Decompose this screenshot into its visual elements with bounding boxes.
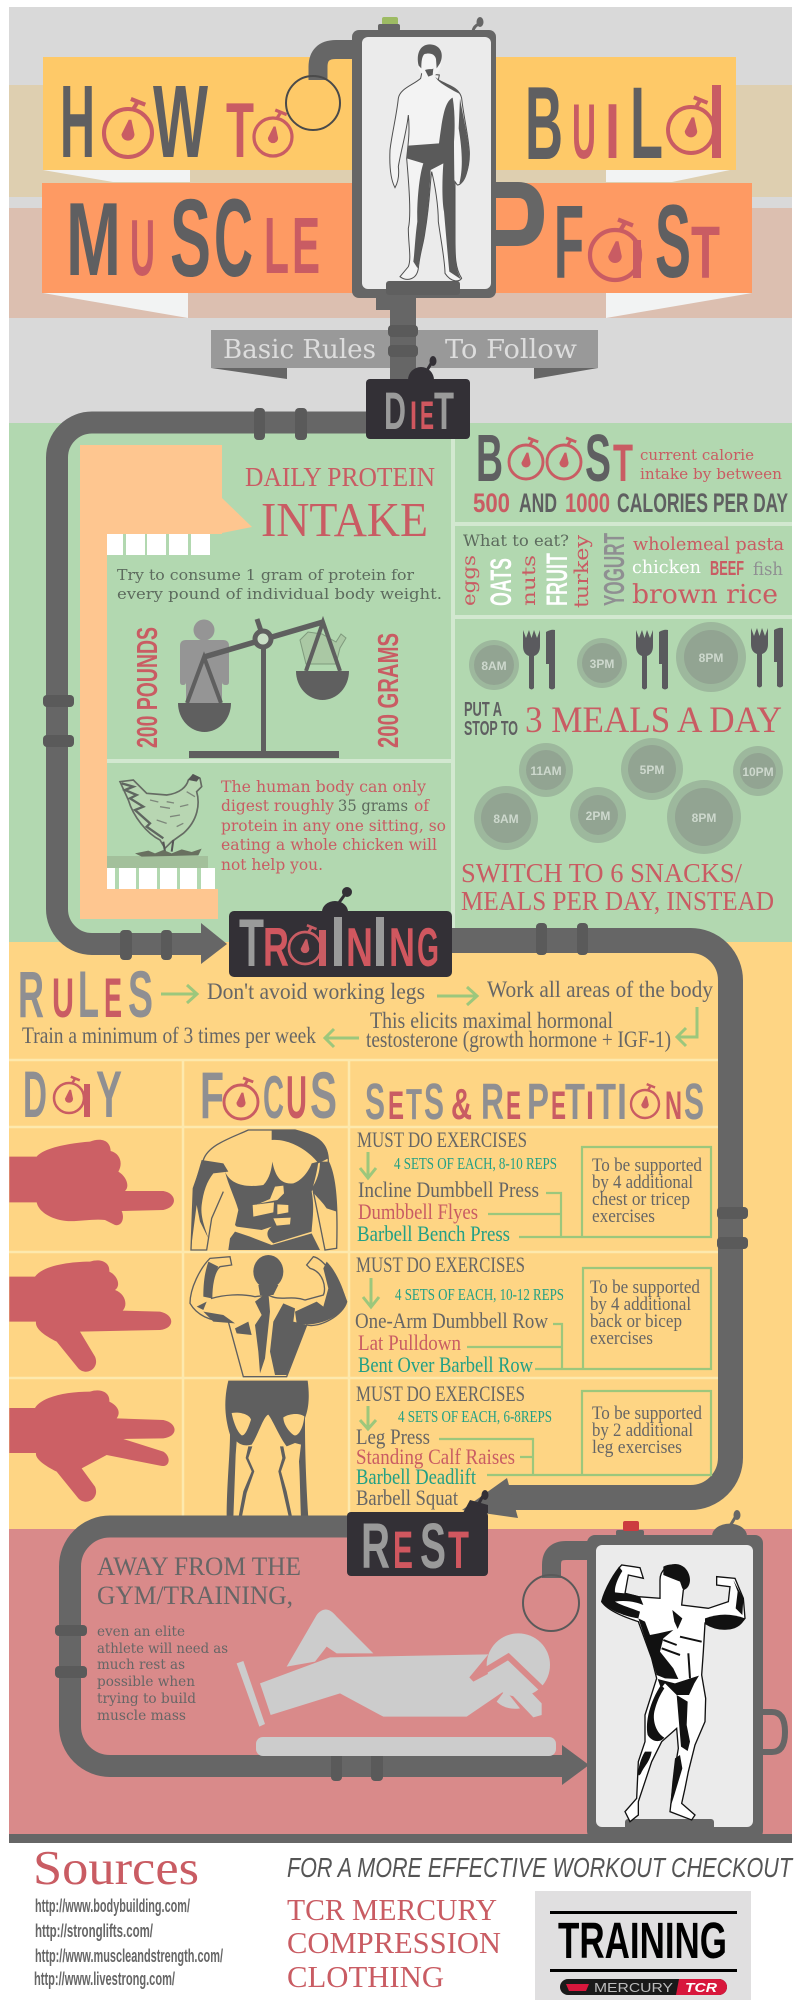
- text: chicken fact: not help you.: [221, 856, 323, 874]
- heading: boost: intake by between: [640, 465, 782, 483]
- column heading: focus: U: [286, 1064, 307, 1131]
- title banner: Muscle Fast: E: [292, 201, 320, 290]
- gauge on pipe: [286, 50, 354, 130]
- heading: boost: S: [585, 421, 611, 496]
- title banner: Muscle Fast: T: [691, 211, 720, 294]
- label box: training: [229, 887, 452, 981]
- list: source links: [34, 1896, 223, 1989]
- exercises: row two: MUST DO EXERCISES: [356, 1252, 525, 1277]
- exercises: row three: MUST DO EXERCISES: [356, 1381, 525, 1406]
- exercises: row three: Standing Calf Raises: [356, 1444, 515, 1469]
- heading: switch to six meals: SWITCH TO 6 SNACKS/: [461, 858, 742, 888]
- text: chicken fact: eating a whole chicken will: [221, 836, 437, 854]
- text: rest advice: even an elite: [97, 1624, 185, 1640]
- text: what to eat: OATS: [485, 558, 518, 606]
- text: what to eat: BEEF: [710, 558, 744, 580]
- icon: peach mouth: [80, 445, 252, 919]
- title banner: How To Build: [43, 57, 736, 182]
- pipe: rest loop: [55, 1526, 589, 1785]
- text: protein rule: [117, 566, 442, 603]
- column heading: sets and repetitions: E: [551, 1084, 566, 1128]
- label: 200 pounds: 200 POUNDS: [132, 627, 164, 748]
- text: chicken fact: [221, 778, 446, 874]
- chart: six meal plates: 10PM: [742, 765, 774, 779]
- text: calories per day: 1000: [565, 488, 610, 518]
- title banner: Muscle Fast: U: [130, 203, 155, 292]
- text: calories per day: [473, 488, 788, 518]
- label box: rest: E: [393, 1521, 413, 1580]
- label box: training: N: [346, 916, 373, 978]
- list: source links: http://www.muscleandstrength.com/: [35, 1946, 223, 1966]
- ribbon: basic rules to follow: [211, 330, 598, 379]
- pipe: diet to training: [43, 408, 370, 964]
- heading: sources: Sources: [33, 1840, 199, 1895]
- flow: training rules with arrows: testosterone (growth hormone + IGF-1): [366, 1027, 671, 1052]
- column heading: focus: F: [200, 1058, 224, 1132]
- exercises: row three: Leg Press: [356, 1424, 430, 1449]
- text: rest advice: trying to build: [97, 1691, 196, 1707]
- exercises: row one: MUST DO EXERCISES: [357, 1127, 527, 1152]
- panel: training background: [9, 942, 792, 1529]
- heading: switch to six meals: [461, 858, 774, 916]
- machine: skinny man: [352, 17, 496, 298]
- heading: rules: S: [128, 957, 153, 1031]
- pipe: machine to diet: [376, 298, 418, 385]
- heading: boost: current calorie: [640, 446, 754, 464]
- heading: daily protein intake: [245, 462, 435, 547]
- column heading: sets and repetitions: S: [365, 1073, 385, 1130]
- pipe: training to rest: [450, 923, 748, 1518]
- text: chicken fact: The human body can only: [221, 778, 426, 796]
- exercises: row two: by 4 additional: [590, 1294, 691, 1315]
- label box: training: R: [263, 916, 289, 978]
- text: chicken fact: digest roughly: [221, 797, 334, 815]
- title banner: How To Build: L: [630, 66, 663, 180]
- text: what to eat: What to eat?: [463, 531, 569, 550]
- title banner: How To Build: B: [525, 66, 563, 182]
- logo: training mercury tcr: MERCURY: [594, 1980, 673, 1995]
- exercises: row two: Bent Over Barbell Row: [358, 1352, 533, 1377]
- heading: rules: E: [104, 966, 122, 1029]
- heading: three meals a day: 3 MEALS A DAY: [525, 700, 782, 741]
- flow: training rules with arrows: Work all areas of the body: [487, 977, 713, 1002]
- text: what to eat: [458, 531, 784, 610]
- chart: six meal plates: 8PM: [692, 811, 716, 825]
- title banner: How To Build: T: [226, 86, 254, 174]
- text: product name: [287, 1892, 501, 1994]
- label box: rest: T: [448, 1521, 469, 1580]
- heading: rules: R: [18, 957, 44, 1031]
- text: rest advice: much rest as: [97, 1657, 185, 1673]
- exercises: row two: [355, 1252, 711, 1377]
- exercises: row one: Incline Dumbbell Press: [358, 1177, 539, 1202]
- text: chicken fact: protein in any one sitting, so: [221, 817, 446, 835]
- heading: daily protein intake: DAILY PROTEIN: [245, 462, 435, 492]
- text: calories per day: CALORIES: [617, 488, 708, 518]
- exercises: row three: Barbell Deadlift: [356, 1464, 476, 1489]
- column heading: sets and repetitions: T: [565, 1073, 585, 1130]
- text: what to eat: chicken: [632, 557, 701, 578]
- heading: away from the gym: [97, 1552, 301, 1610]
- exercises: row three: 4 SETS OF EACH, 6-8REPS: [398, 1407, 552, 1426]
- text: protein rule: Try to consume 1 gram of protein for: [117, 566, 415, 584]
- text: chicken fact: 35 grams: [338, 797, 408, 815]
- heading: boost: B: [476, 421, 503, 496]
- exercises: row three: [356, 1381, 711, 1510]
- label box: diet: [366, 356, 470, 441]
- exercises: row one: To be supported: [592, 1155, 702, 1176]
- panel: header background: [9, 7, 792, 424]
- chart: six meal plates: [474, 738, 783, 854]
- icon: leg muscles: [225, 1381, 309, 1518]
- column heading: sets and repetitions: &: [451, 1080, 472, 1129]
- exercises: row one: by 4 additional: [592, 1172, 693, 1193]
- label box: diet: D: [384, 382, 406, 441]
- label box: training: G: [417, 916, 439, 978]
- icon: balance scale: [178, 619, 349, 758]
- flow: training rules with arrows: [22, 977, 713, 1052]
- column heading: sets and repetitions: E: [506, 1084, 521, 1128]
- exercises: row three: Barbell Squat: [356, 1485, 458, 1510]
- label box: rest: S: [420, 1510, 446, 1582]
- exercises: row three: by 2 additional: [592, 1420, 693, 1441]
- heading: three meals a day: PUT A: [464, 699, 502, 721]
- column heading: focus: C: [263, 1064, 284, 1131]
- flow: training rules with arrows: This elicits maximal hormonal: [370, 1008, 613, 1033]
- text: rest advice: muscle mass: [97, 1708, 186, 1724]
- text: product name: CLOTHING: [287, 1959, 444, 1994]
- label box: rest: R: [361, 1510, 390, 1582]
- text: chicken fact: of: [414, 797, 430, 815]
- exercises: row two: exercises: [590, 1328, 653, 1349]
- label box: training: T: [239, 905, 264, 981]
- column heading: sets and repetitions: E: [388, 1084, 404, 1128]
- title banner: Muscle Fast: M: [66, 182, 121, 298]
- column heading: day: [23, 1057, 122, 1131]
- title banner: Muscle Fast: S: [655, 184, 691, 300]
- column heading: sets and repetitions: I: [586, 1084, 594, 1128]
- column heading: sets and repetitions: T: [406, 1080, 422, 1129]
- exercises: row two: back or bicep: [590, 1311, 682, 1332]
- heading: away from the gym: AWAY FROM THE: [97, 1552, 301, 1581]
- label box: diet: I: [410, 394, 417, 438]
- exercises: row one: [357, 1127, 711, 1246]
- exercises: row one: 4 SETS OF EACH, 8-10 REPS: [394, 1154, 557, 1173]
- text: what to eat: brown rice: [632, 580, 778, 610]
- chart: three meal plates: 8PM: [699, 651, 723, 665]
- flow: training rules with arrows: Train a minimum of 3 times per week: [22, 1023, 316, 1048]
- exercises: row one: Barbell Bench Press: [357, 1221, 510, 1246]
- chart: three meal plates: [469, 622, 783, 692]
- label box: training: N: [389, 916, 415, 978]
- flow: training rules with arrows: Don't avoid working legs: [207, 979, 425, 1004]
- panel: diet background: [9, 423, 792, 942]
- chart: six meal plates: 5PM: [640, 763, 664, 777]
- exercises: row three: To be supported: [592, 1403, 702, 1424]
- figure: skinny man: [390, 44, 469, 281]
- icon: hand one finger: [9, 1140, 174, 1225]
- icon: resting figure on bed: [237, 1610, 556, 1756]
- heading: three meals a day: STOP TO: [464, 718, 518, 740]
- text: what to eat: FRUIT: [541, 553, 574, 606]
- column heading: sets and repetitions: N: [665, 1084, 682, 1128]
- heading: boost: [476, 421, 782, 496]
- exercises: row one: Dumbbell Flyes: [358, 1199, 478, 1224]
- text: rest advice: athlete will need as: [97, 1641, 228, 1657]
- title banner: How To Build: I: [605, 87, 620, 175]
- text: rest advice: possible when: [97, 1674, 195, 1690]
- label box: diet: T: [434, 382, 454, 441]
- text: calories per day: AND: [519, 488, 557, 518]
- title banner: How To Build: U: [572, 87, 596, 175]
- chart: six meal plates: 2PM: [586, 809, 610, 823]
- title banner: Muscle Fast: S: [170, 177, 211, 300]
- column heading: sets and repetitions: R: [481, 1073, 504, 1130]
- column heading: sets and repetitions: I: [617, 1073, 627, 1130]
- column heading: sets and repetitions: P: [527, 1073, 549, 1130]
- title banner: Muscle Fast: C: [214, 177, 253, 300]
- exercises: row two: Lat Pulldown: [358, 1330, 461, 1355]
- exercises: row one: chest or tricep: [592, 1189, 690, 1210]
- logo: training mercury tcr: [535, 1891, 751, 2000]
- text: what to eat: nuts: [518, 555, 540, 606]
- exercises: row two: One-Arm Dumbbell Row: [355, 1308, 548, 1333]
- exercises: row two: To be supported: [590, 1277, 700, 1298]
- chart: six meal plates: 8AM: [493, 812, 519, 826]
- text: product name: TCR MERCURY: [287, 1892, 497, 1927]
- column heading: focus: S: [310, 1058, 337, 1132]
- title banner: Muscle Fast: L: [264, 201, 289, 290]
- column heading: day: Y: [96, 1057, 122, 1131]
- label box: diet: E: [420, 394, 434, 438]
- chart: six meal plates: 11AM: [530, 764, 562, 778]
- heading: away from the gym: GYM/TRAINING,: [97, 1581, 293, 1610]
- column heading: sets and repetitions: S: [684, 1073, 704, 1130]
- column heading: sets and repetitions: [365, 1073, 704, 1130]
- column heading: sets and repetitions: S: [424, 1073, 444, 1130]
- text: rest advice: [97, 1624, 228, 1724]
- icon: hand three fingers: [9, 1390, 175, 1502]
- logo: training mercury tcr: TRAINING: [558, 1912, 727, 1969]
- text: what to eat: wholemeal pasta: [633, 534, 784, 555]
- text: what to eat: eggs: [458, 555, 480, 606]
- exercises: row two: 4 SETS OF EACH, 10-12 REPS: [395, 1285, 564, 1304]
- list: source links: http://www.livestrong.com/: [34, 1969, 175, 1989]
- title banner: Muscle Fast: F: [554, 185, 584, 301]
- panel: rest background: [9, 1529, 792, 1843]
- text: product name: COMPRESSION: [287, 1925, 501, 1960]
- text: what to eat: YOGURT: [599, 533, 631, 606]
- ribbon: basic rules to follow: To Follow: [445, 335, 577, 365]
- icon: hand two fingers: [9, 1260, 171, 1372]
- heading: rules: L: [78, 957, 99, 1031]
- logo: training mercury tcr: TCR: [685, 1980, 718, 1995]
- title banner: How To Build: H: [60, 64, 95, 179]
- label box: rest: [347, 1490, 488, 1582]
- heading: boost: T: [613, 434, 633, 493]
- column heading: focus: [200, 1058, 337, 1132]
- text: what to eat: fish: [753, 559, 783, 580]
- ribbon: basic rules to follow: Basic Rules: [223, 335, 376, 365]
- column heading: sets and repetitions: T: [596, 1073, 616, 1130]
- machine: bodybuilder: [523, 1510, 785, 1839]
- list: source links: http://www.bodybuilding.com/: [35, 1896, 190, 1916]
- icon: back muscles: [190, 1255, 347, 1377]
- chart: three meal plates: 8AM: [481, 659, 507, 673]
- exercises: row three: leg exercises: [592, 1437, 682, 1458]
- label: 200 grams: 200 GRAMS: [373, 633, 405, 748]
- text: protein rule: every pound of individual body weight.: [117, 585, 442, 603]
- title banner: Muscle Fast: [42, 177, 752, 318]
- title banner: How To Build: W: [153, 64, 208, 179]
- heading: rules: [18, 957, 153, 1031]
- exercises: row one: exercises: [592, 1206, 655, 1227]
- chart: three meal plates: 3PM: [590, 657, 614, 671]
- column heading: day: D: [23, 1057, 47, 1131]
- list: source links: http://stronglifts.com/: [35, 1921, 153, 1941]
- text: calories per day: 500: [473, 488, 510, 518]
- heading: rules: U: [52, 966, 74, 1029]
- text: what to eat: turkey: [569, 534, 593, 608]
- heading: daily protein intake: INTAKE: [261, 492, 428, 547]
- icon: chest muscles: [191, 1130, 337, 1250]
- figure: bodybuilder: [602, 1564, 745, 1822]
- icon: chicken: [107, 774, 215, 889]
- heading: switch to six meals: MEALS PER DAY, INSTEAD: [461, 886, 774, 916]
- handle on machine: [496, 190, 536, 238]
